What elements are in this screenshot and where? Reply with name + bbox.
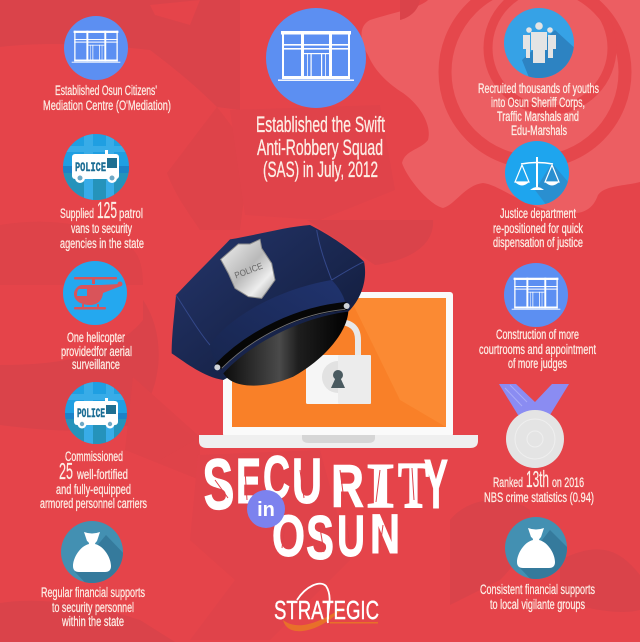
text: recruited youths: Edu-Marshals [511, 123, 567, 138]
title: U [337, 504, 365, 569]
text: 125 patrol vans: Supplied [60, 206, 94, 221]
icon: building, mediation centre [64, 16, 128, 80]
text: financial supports to vigilantes: to local vigilante groups [490, 597, 585, 612]
text: financial supports to vigilantes [480, 582, 595, 612]
icon: money bag, personnel [61, 521, 123, 583]
text: recruited youths: into Osun Sheriff Corps, [491, 95, 585, 110]
title [201, 444, 448, 573]
text: courtrooms and judges [479, 327, 596, 371]
text: 25 armored carriers: well-fortified [76, 467, 128, 482]
text: Swift Anti-Robbery Squad: Anti-Robbery Squad [257, 135, 383, 160]
laptop with padlock [199, 292, 478, 448]
icon: helicopter [63, 261, 127, 325]
icon: badge: POLICE [233, 261, 264, 281]
title: Y [424, 445, 448, 523]
text: 25 armored carriers: Commissioned [65, 449, 123, 464]
icon: padlock [306, 322, 371, 404]
police hat [172, 225, 365, 386]
text: Swift Anti-Robbery Squad: Established the Swift [256, 112, 385, 137]
text: 125 patrol vans: 125 [97, 197, 117, 223]
text: 25 armored carriers [40, 449, 147, 511]
title: S [306, 504, 334, 573]
icon: armored police van: POLICE [77, 407, 105, 421]
text: 25 armored carriers: and fully-equipped [56, 482, 131, 497]
title: O [272, 504, 305, 569]
text: helicopter: surveillance [72, 357, 120, 372]
text: 25 armored carriers: 25 [59, 458, 73, 484]
text: 25 armored carriers: armored personnel carriers [40, 496, 147, 511]
text: ranked 13th: 13th [526, 466, 549, 492]
icon: badge [221, 239, 275, 298]
text: financial supports to personnel [41, 585, 145, 629]
title: I [366, 450, 395, 521]
text: mediation centre [43, 83, 171, 113]
logo: Strategic: STRATEGIC [274, 595, 379, 625]
text: helicopter: providedfor aerial [61, 344, 132, 359]
text: justice department: Justice department [500, 206, 576, 221]
title: C [263, 444, 290, 511]
text: Swift Anti-Robbery Squad [256, 112, 385, 182]
text: 125 patrol vans: vans to security [71, 221, 132, 236]
badge: in [247, 490, 285, 528]
text: ranked 13th [484, 466, 594, 505]
icon: scales of justice [505, 141, 569, 205]
text: 125 patrol vans [60, 197, 144, 251]
text: justice department: re-positioned for quick [493, 221, 583, 236]
text: ranked 13th: Ranked [493, 475, 523, 490]
icon: people [504, 8, 574, 78]
text: financial supports to personnel: within the state [61, 614, 124, 629]
icon: police van: POLICE [75, 160, 106, 175]
text: ranked 13th: on 2016 [552, 475, 584, 490]
text: financial supports to personnel: Regular financial supports [41, 585, 145, 600]
icon: building, courtrooms [504, 263, 568, 327]
text: mediation centre: Established Osun Citizens' [55, 83, 157, 98]
title: N [370, 502, 400, 565]
title: S [201, 444, 236, 526]
text: mediation centre: Mediation Centre (O'Mediation) [43, 98, 171, 113]
text: helicopter [61, 330, 132, 372]
title: E [236, 445, 261, 517]
icon: medal [499, 384, 569, 468]
title: T [398, 449, 429, 522]
text: recruited youths [478, 81, 599, 138]
text: helicopter: One helicopter [67, 330, 125, 345]
text: justice department [493, 206, 583, 250]
text: 125 patrol vans: agencies in the state [60, 236, 144, 251]
text: justice department: dispensation of justice [493, 235, 583, 250]
title: U [292, 445, 322, 517]
badge: in: in [257, 499, 275, 521]
text: financial supports to personnel: to security personnel [52, 600, 134, 615]
title: R [331, 453, 364, 520]
text: courtrooms and judges: of more judges [508, 356, 567, 371]
icon: police van [63, 134, 129, 200]
icon: money bag, vigilante [505, 517, 567, 579]
icon: armored police van [65, 382, 127, 444]
text: Swift Anti-Robbery Squad: (SAS) in July, 2012 [263, 157, 378, 182]
text: recruited youths: Traffic Marshals and [497, 109, 579, 124]
icon: building, Swift Anti-Robbery Squad [266, 8, 366, 108]
text: ranked 13th: NBS crime statistics (0.94) [484, 490, 594, 505]
logo: Strategic [274, 584, 379, 631]
text: 125 patrol vans: patrol [119, 206, 143, 221]
text: courtrooms and judges: Construction of more [496, 327, 579, 342]
